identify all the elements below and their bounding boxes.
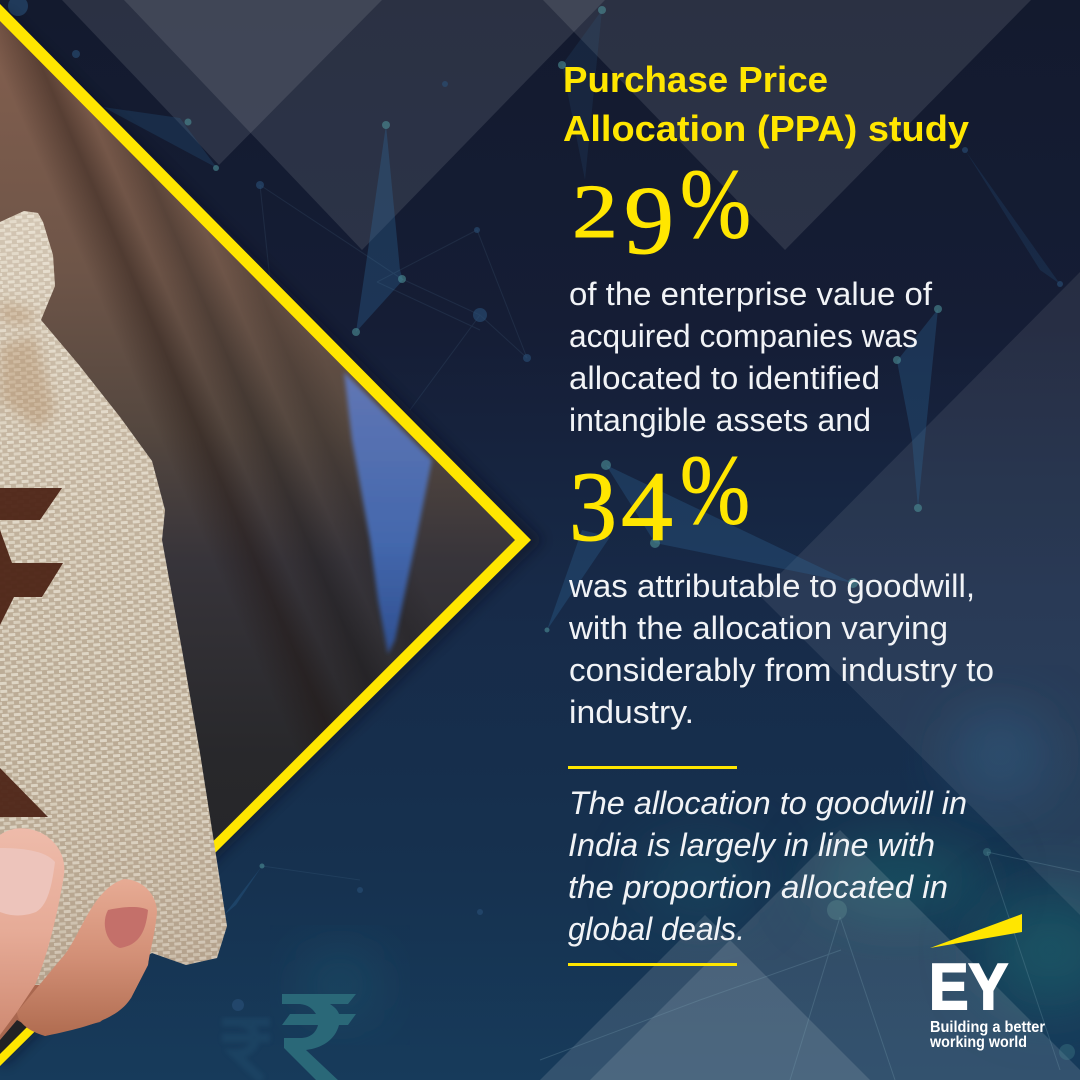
hand palm [0, 950, 150, 1040]
finger left [0, 828, 64, 1035]
logo tagline [929, 1019, 1045, 1051]
divider: top [568, 766, 737, 769]
bag knot shading [0, 300, 55, 430]
text block: italic note [568, 785, 967, 947]
text block: italic note: the proportion allocated in [568, 869, 948, 905]
stat: 29%: 9 [624, 167, 674, 274]
title: Allocation (PPA) study [563, 108, 969, 149]
chevron shadow [0, 18, 532, 1060]
text block: intangibles: acquired companies was [569, 318, 918, 354]
nail right [105, 907, 148, 948]
title: Purchase Price [563, 59, 828, 100]
text block: goodwill: considerably from industry to [569, 652, 994, 688]
photo: money bag [0, 211, 227, 1040]
photo: fingers [0, 828, 157, 1036]
stat: 34%: 4 [621, 451, 673, 562]
translucent diamond: right [759, 272, 1080, 915]
stat: 29%: % [680, 148, 751, 259]
finger right [17, 879, 157, 1036]
text block: intangibles: of the enterprise value of [569, 276, 932, 312]
text block: intangibles [569, 276, 932, 438]
logo beam [930, 914, 1022, 948]
stat: 29%: 2 [572, 170, 618, 254]
stat: 29% [572, 148, 751, 274]
text block: italic note: global deals. [568, 911, 745, 947]
stat: 34%: % [680, 434, 750, 545]
text block: intangibles: allocated to identified [569, 360, 880, 396]
text block: goodwill: was attributable to goodwill, [568, 568, 975, 604]
logo tagline: Building a better [930, 1019, 1045, 1036]
text block: goodwill: industry. [569, 694, 694, 730]
logo wordmark: EY [929, 950, 1008, 1023]
text block: intangibles: intangible assets and [569, 402, 871, 438]
stat: 34%: 3 [569, 451, 617, 562]
text block: italic note: The allocation to goodwill in [569, 785, 967, 821]
bag body [0, 211, 227, 985]
divider: bottom [568, 963, 737, 966]
photo: suit background [0, 0, 540, 1080]
translucent triangles: bottom [540, 830, 1080, 1080]
logo: EY [929, 914, 1045, 1051]
text block: goodwill: with the allocation varying [568, 610, 948, 646]
logo tagline: working world [929, 1034, 1027, 1051]
text block: italic note: India is largely in line with [568, 827, 935, 863]
text block: goodwill [568, 568, 994, 730]
translucent triangles: top [62, 0, 1031, 250]
stat: 34% [569, 434, 750, 562]
tie [344, 372, 432, 654]
nail left [0, 848, 55, 915]
network spikes [103, 10, 1060, 915]
yellow chevron [0, 4, 531, 1066]
title [563, 59, 969, 149]
icon: ghost rupee symbol [222, 994, 356, 1080]
rupee print on bag [0, 488, 63, 817]
